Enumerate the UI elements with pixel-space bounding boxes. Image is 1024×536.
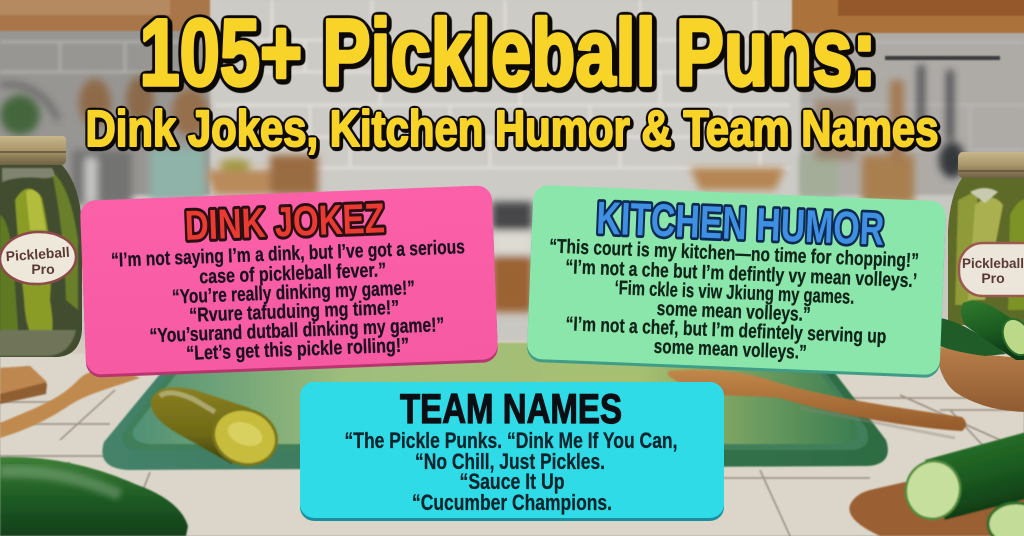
text block: kitchen humor [545,235,919,368]
cutting board [102,343,888,470]
panel: kitchen humor [527,185,946,378]
jar label: Pro [981,270,1005,286]
heading: kitchen humor: KITCHEN HUMOR [595,191,885,255]
wall cabinets [0,0,210,31]
heading: dink jokez: DINK JOKEZ [184,194,386,249]
text block: team names: “The Pickle Punks. “Dink Me If You Can, [344,428,678,453]
title [86,0,938,157]
text block: kitchen humor: “This court is my kitchen—no time for chopping!” [549,235,919,272]
heading: team names: TEAM NAMES [400,385,622,432]
text block: kitchen humor: ‘Fim ckle is viw Jkiung my games. [614,277,855,309]
jar lid [0,136,66,165]
wooden bowl with cucumbers [936,301,1024,412]
text block: dink jokes: “I’m not saying I’m a dink, but I’ve got a serious [111,236,465,272]
bottom-left cucumber [0,457,188,536]
bottom-right board and cucumbers [849,431,1024,536]
text block: dink jokes [111,236,469,368]
left wooden board and spoon [0,366,140,438]
text block: kitchen humor: “I’m not a chef, but I’m defintely serving up [565,313,887,348]
text block: team names: “Cucumber Champions. [412,490,612,515]
text block: dink jokes: case of pickleball fever.” [199,259,387,288]
text block: kitchen humor: some mean volleys.” [653,336,807,364]
panel: team names [300,382,724,521]
jar label [0,230,77,286]
jar lid [958,152,1024,178]
left pickle jar [0,136,82,357]
pickle with slice [151,387,284,473]
jar label: Pro [31,261,55,277]
panel: dink jokes [80,185,498,378]
right wooden spoon [668,370,966,438]
counter [0,345,1024,536]
jar label [959,243,1024,296]
text block: dink jokes: “Rvure tafuduing mg time!” [189,297,400,327]
text block: dink jokes: “You’re really dinking my game!” [172,277,415,308]
text block: kitchen humor: some mean volleys.” [656,298,811,326]
right pickle jar [948,152,1024,325]
text block: dink jokes: “You’surand dutball dinking my game!” [149,314,445,347]
text block: team names: “No Chill, Just Pickles. [415,449,605,474]
text block: dink jokes: “Let’s get this pickle rolling!” [186,334,409,365]
jar label: Pickleball [5,244,70,264]
text block: team names [344,428,678,515]
text block: team names: “Sauce It Up [460,469,564,494]
text block: kitchen humor: “I’m not a che but I’m defintly vy mean volleys.’ [565,256,918,292]
